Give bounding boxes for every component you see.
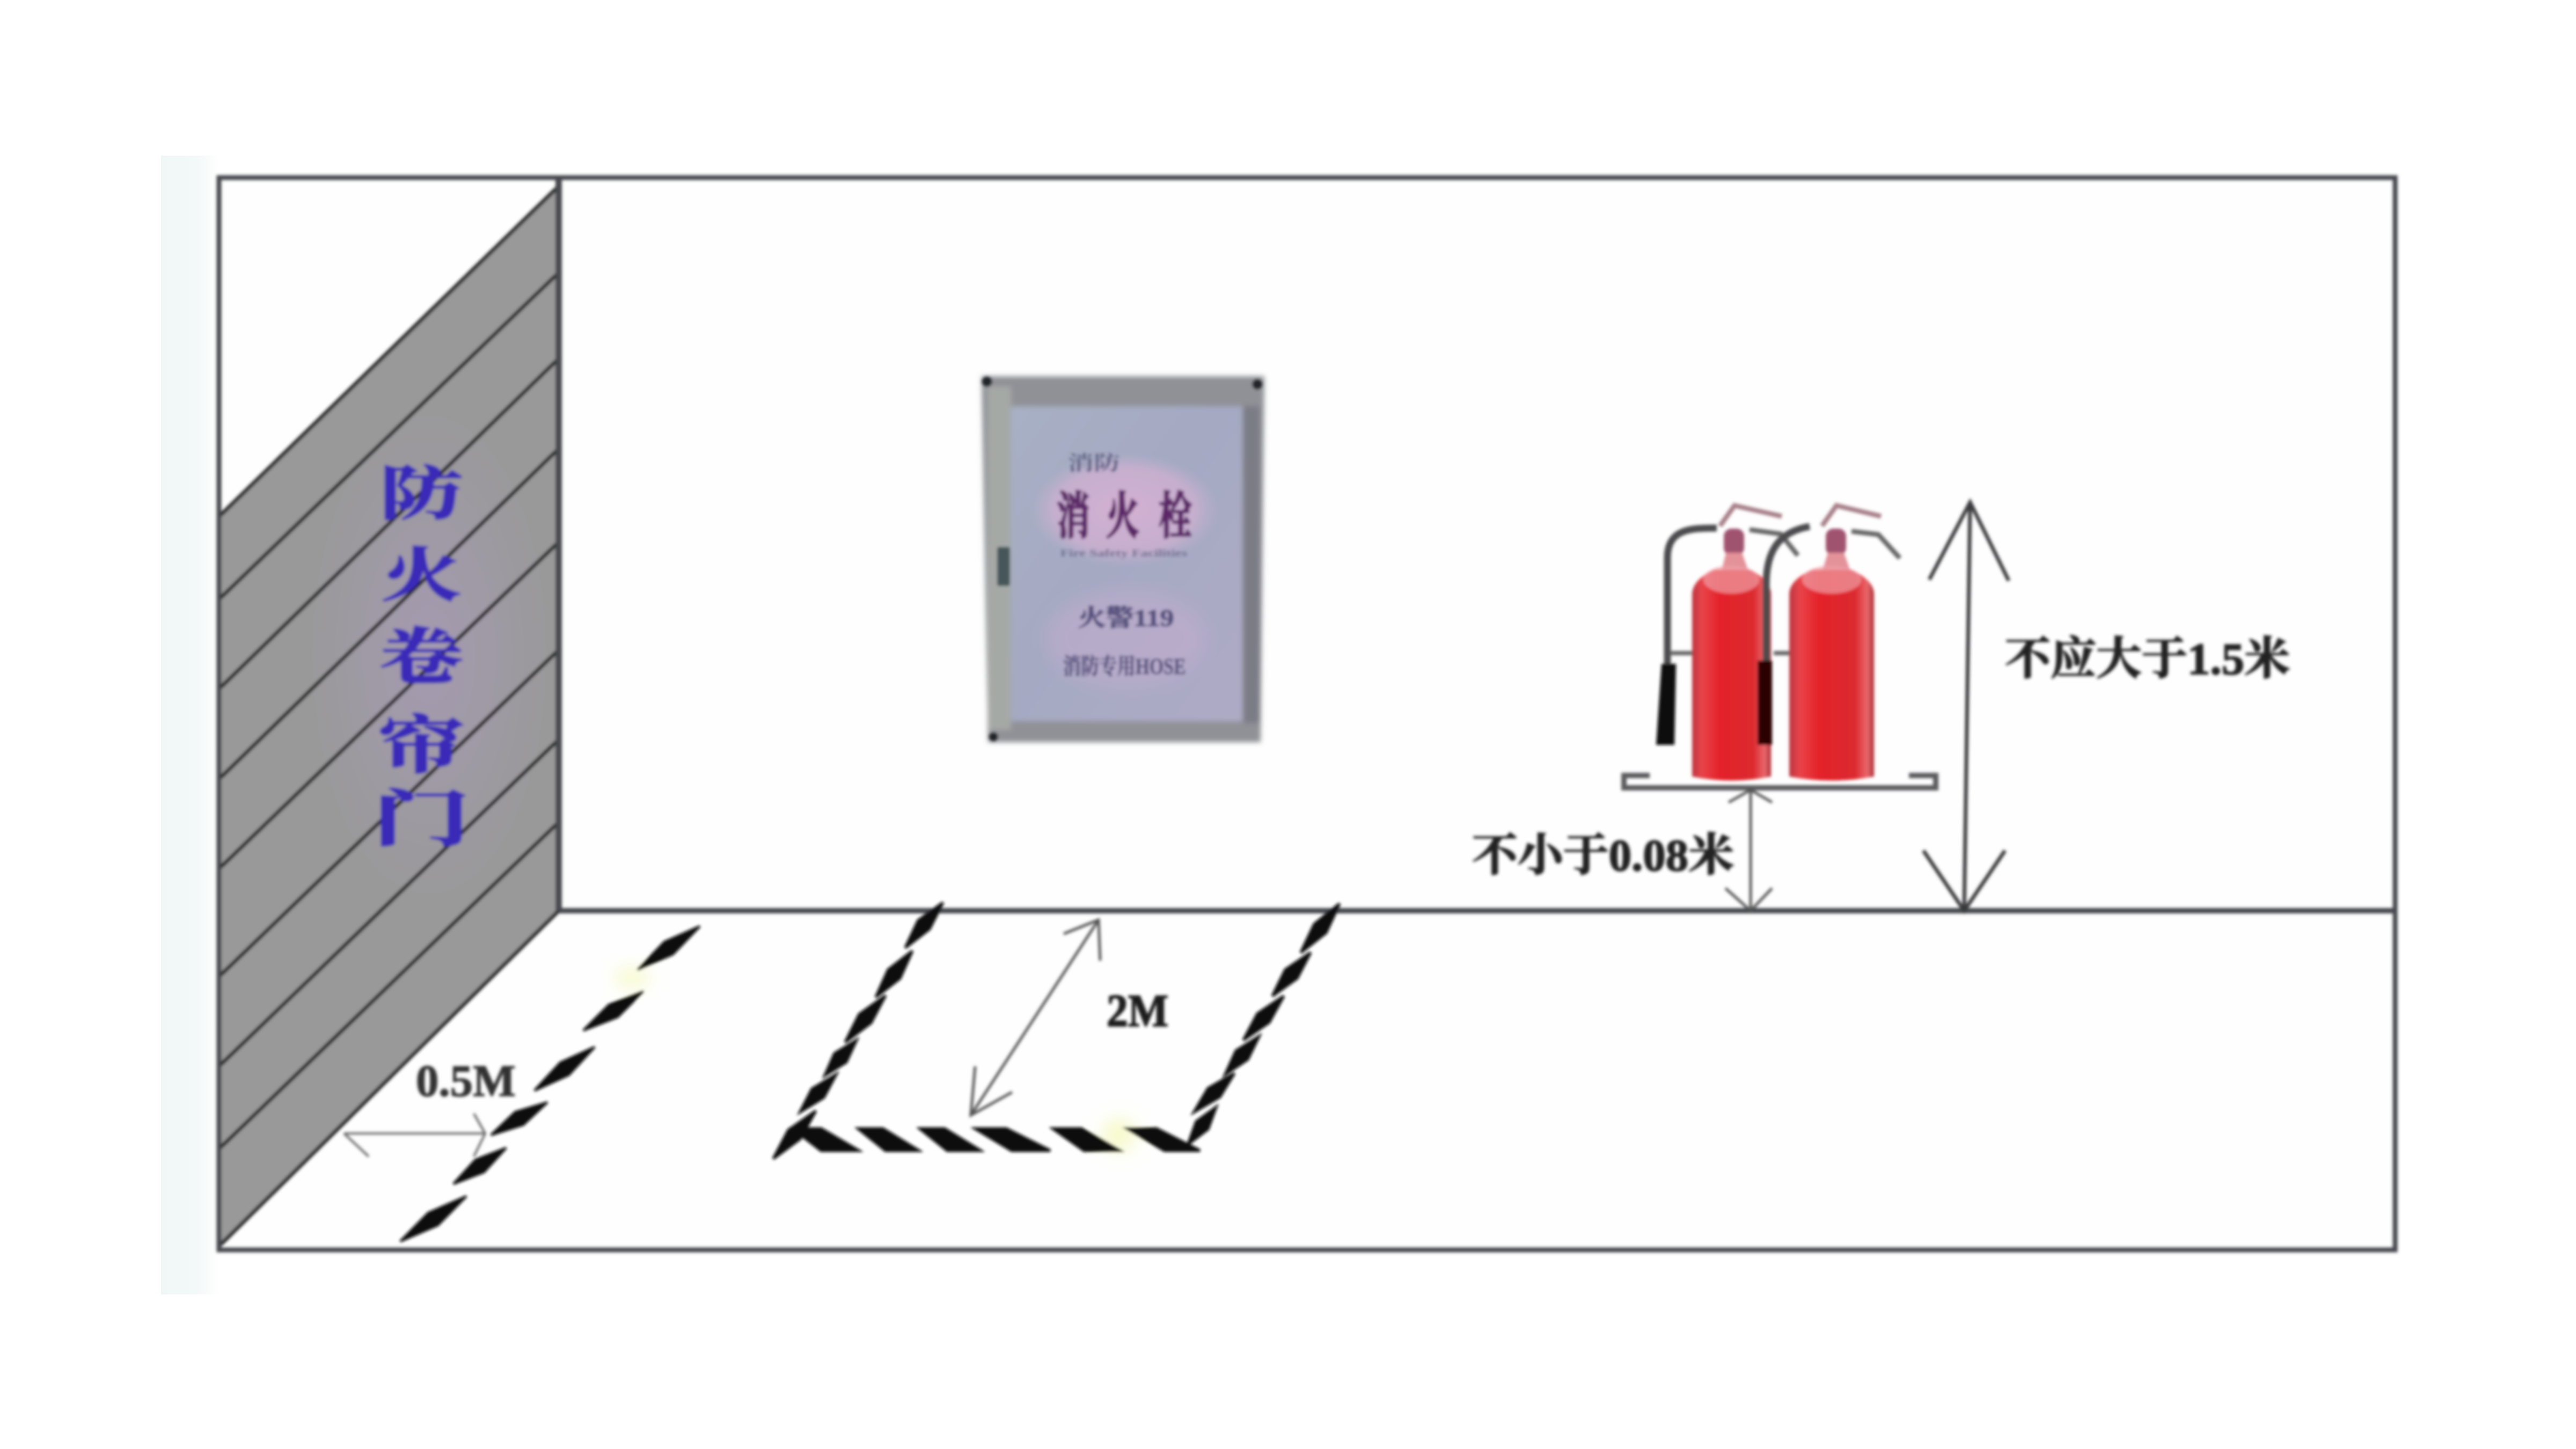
- hydrant sign text: 火: [1106, 489, 1139, 545]
- hydrant sign text: 火警119: [1078, 605, 1174, 631]
- extinguisher left: [1656, 506, 1798, 780]
- hydrant sign text: 栓: [1159, 489, 1192, 545]
- hydrant sign text: 消防专用HOSE: [1063, 654, 1186, 679]
- shelf: [1624, 775, 1936, 788]
- dimension arrow: min height from floor: [1725, 790, 1772, 911]
- cabinet corner bolts: [982, 376, 1263, 742]
- pale left band: [161, 156, 219, 1294]
- roller shutter fire door: [219, 186, 559, 1246]
- floor marking: 0.5M shutter clearance stripes: [400, 926, 700, 1241]
- dimension arrow: max height: [1923, 502, 2009, 911]
- label: not less than 0.08 m: 不小于0.08米: [1472, 831, 1734, 881]
- label: fire shutter door: 卷: [379, 624, 463, 692]
- label: not more than 1.5 m: 不应大于1.5米: [2005, 634, 2290, 684]
- label: fire shutter door: 防: [379, 462, 463, 527]
- hydrant sign text: [1030, 452, 1218, 687]
- floor marking: hydrant clearance zone: [773, 903, 1340, 1159]
- fire extinguishers on shelf: [1624, 506, 1936, 788]
- label: 2M: 2M: [1107, 985, 1168, 1036]
- hydrant sign text: 消: [1057, 489, 1090, 545]
- cabinet handle: [997, 547, 1010, 586]
- label: 0.5M: 0.5M: [416, 1056, 516, 1106]
- extinguisher right: [1758, 506, 1900, 780]
- hydrant sign text: 消防: [1067, 452, 1120, 475]
- hydrant sign text: Fire Safety Facilities: [1060, 547, 1188, 559]
- label: fire shutter door: 门: [372, 786, 470, 854]
- label: fire shutter door: 火: [382, 544, 461, 609]
- label: fire shutter door: [372, 462, 470, 854]
- label: fire shutter door: 帘: [378, 711, 464, 781]
- dimension arrow: 2M: [971, 920, 1100, 1115]
- fire hydrant cabinet: [982, 376, 1264, 742]
- dimension arrow: 0.5M: [344, 1114, 485, 1157]
- room interior: [219, 178, 2395, 1250]
- room outline and floor line: [219, 178, 2395, 1250]
